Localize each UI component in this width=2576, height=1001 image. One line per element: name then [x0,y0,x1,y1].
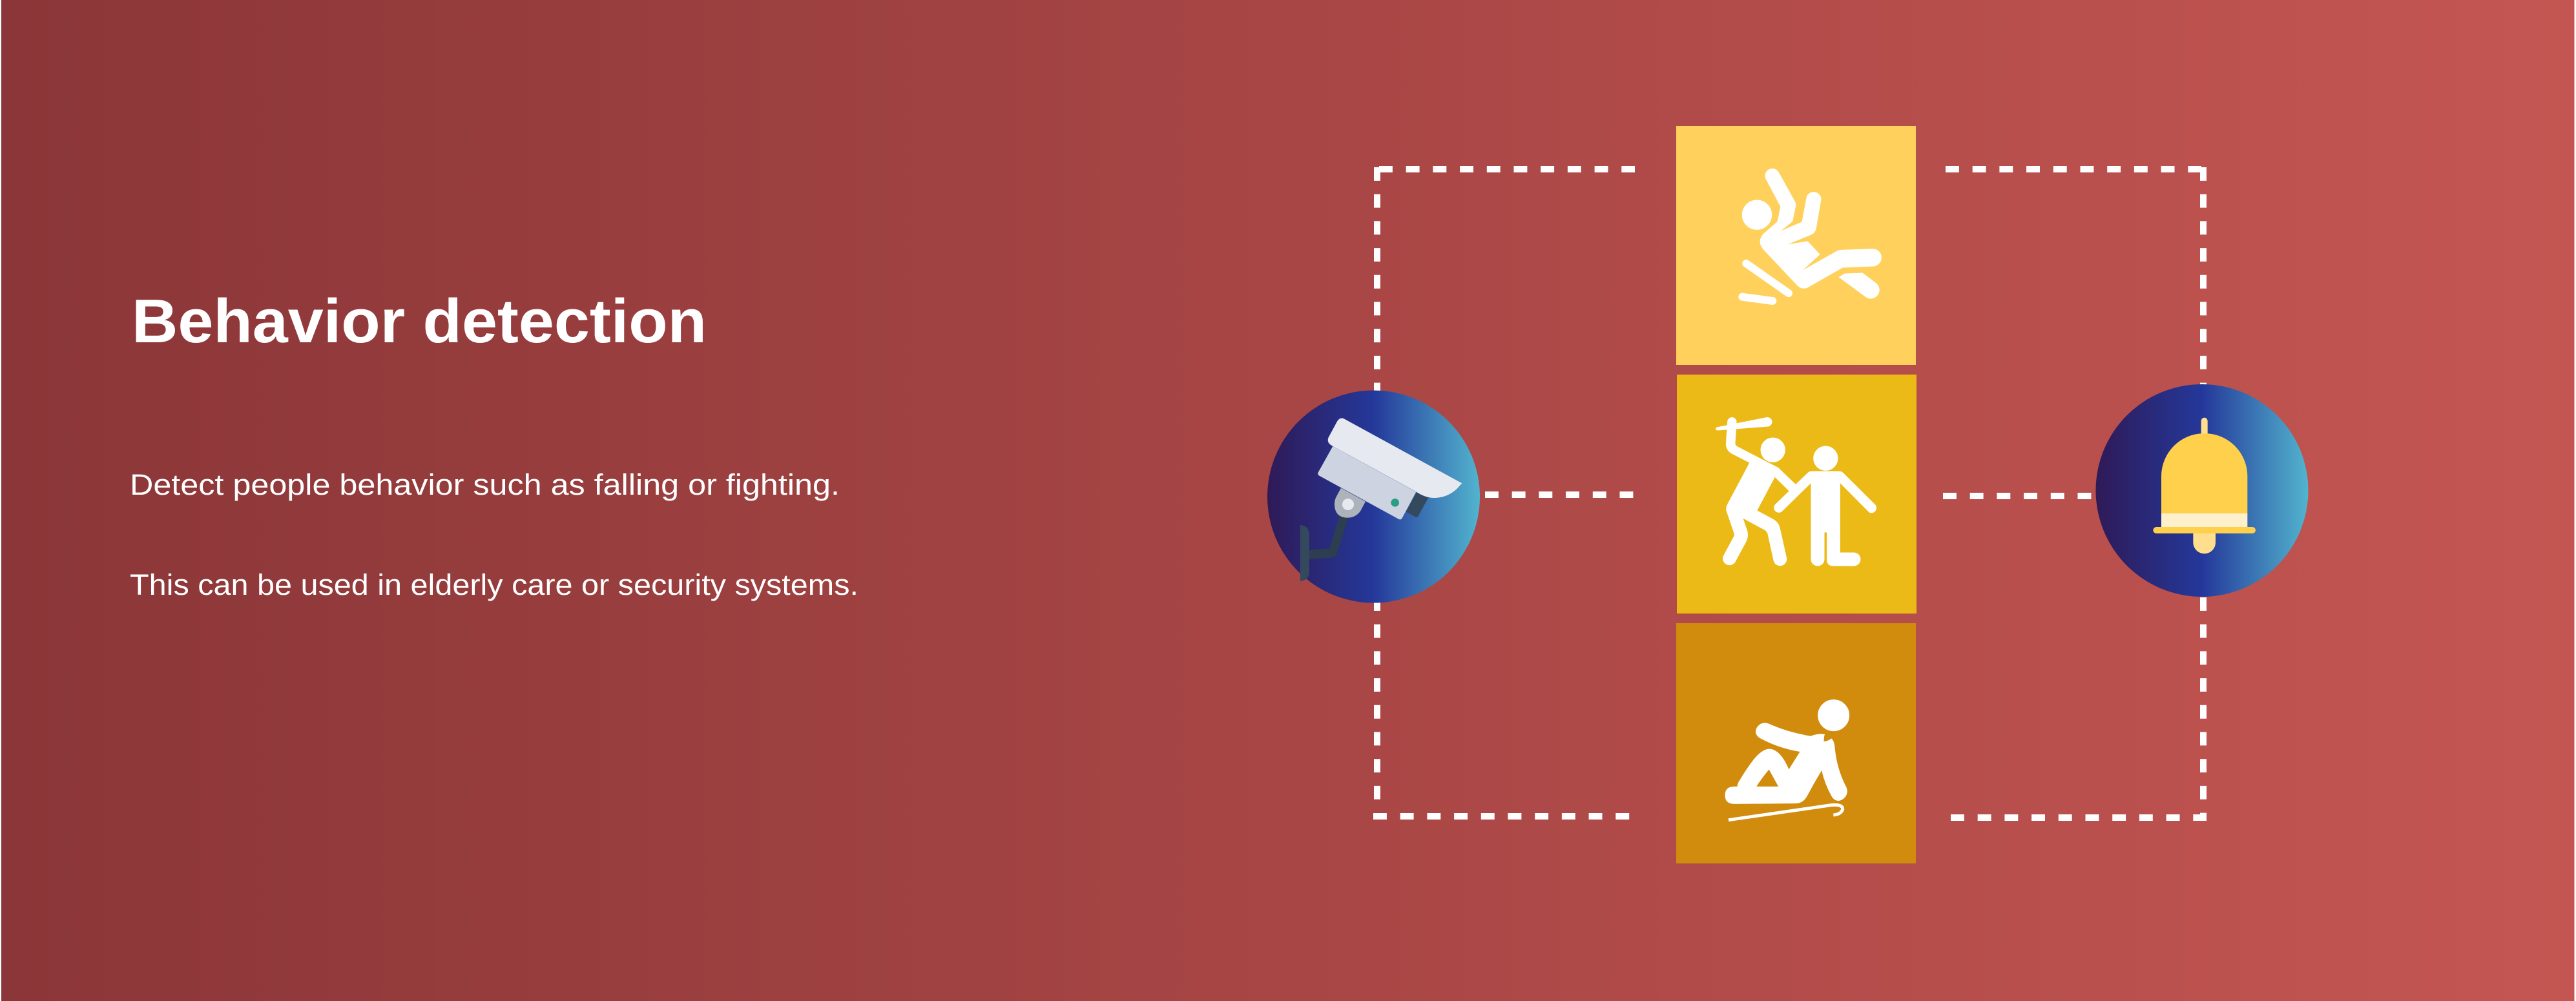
icon: alarm bell in gradient circle [2095,384,2309,597]
dashed connectors [1373,167,2207,821]
connector: fight tile to bell [1943,493,2092,499]
title: Behavior detection [132,287,707,356]
icon: security camera in gradient circle [1267,390,1480,603]
text block: description line 1: Detect people behavior such as falling or fighting. [130,468,840,501]
connector: camera down and across to sitting tile [1373,597,1630,816]
icon: seated elderly person with dropped cane [1725,700,1849,820]
tile: person fallen with cane [1676,623,1916,863]
tile: falling person [1676,126,1916,365]
text block: description line 2: This can be used in elderly care or security systems. [130,568,858,601]
connector: camera up and across to fall tile [1377,167,1635,391]
connector: fall tile across and down to bell [1946,167,2203,387]
icon: person striking another with a bat [1716,418,1876,566]
icon: person slipping and falling [1742,169,1881,301]
connector: camera to fight tile [1485,491,1634,498]
connector: sitting tile across and up to bell [1951,597,2207,821]
tile: fighting people [1677,375,1916,614]
